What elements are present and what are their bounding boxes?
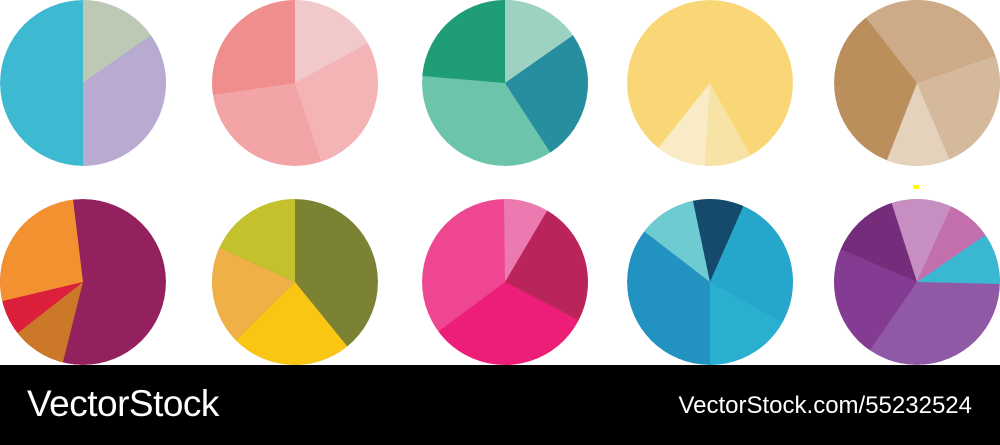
yellow dot [913, 185, 919, 189]
pie 7 [212, 199, 378, 365]
pie 9 [627, 199, 793, 365]
pie 8 [422, 199, 588, 365]
pie 5 [834, 0, 1000, 166]
pie 4 [627, 0, 793, 166]
pie 6 [0, 199, 166, 365]
pie 3 [422, 0, 588, 166]
pie 2 [212, 0, 378, 166]
footer bar [0, 365, 1000, 445]
pie 1 [0, 0, 166, 166]
logo text: VectorStock [27, 383, 219, 424]
pie 10 [834, 199, 1000, 365]
url text: VectorStock.com/55232524 [678, 392, 972, 419]
